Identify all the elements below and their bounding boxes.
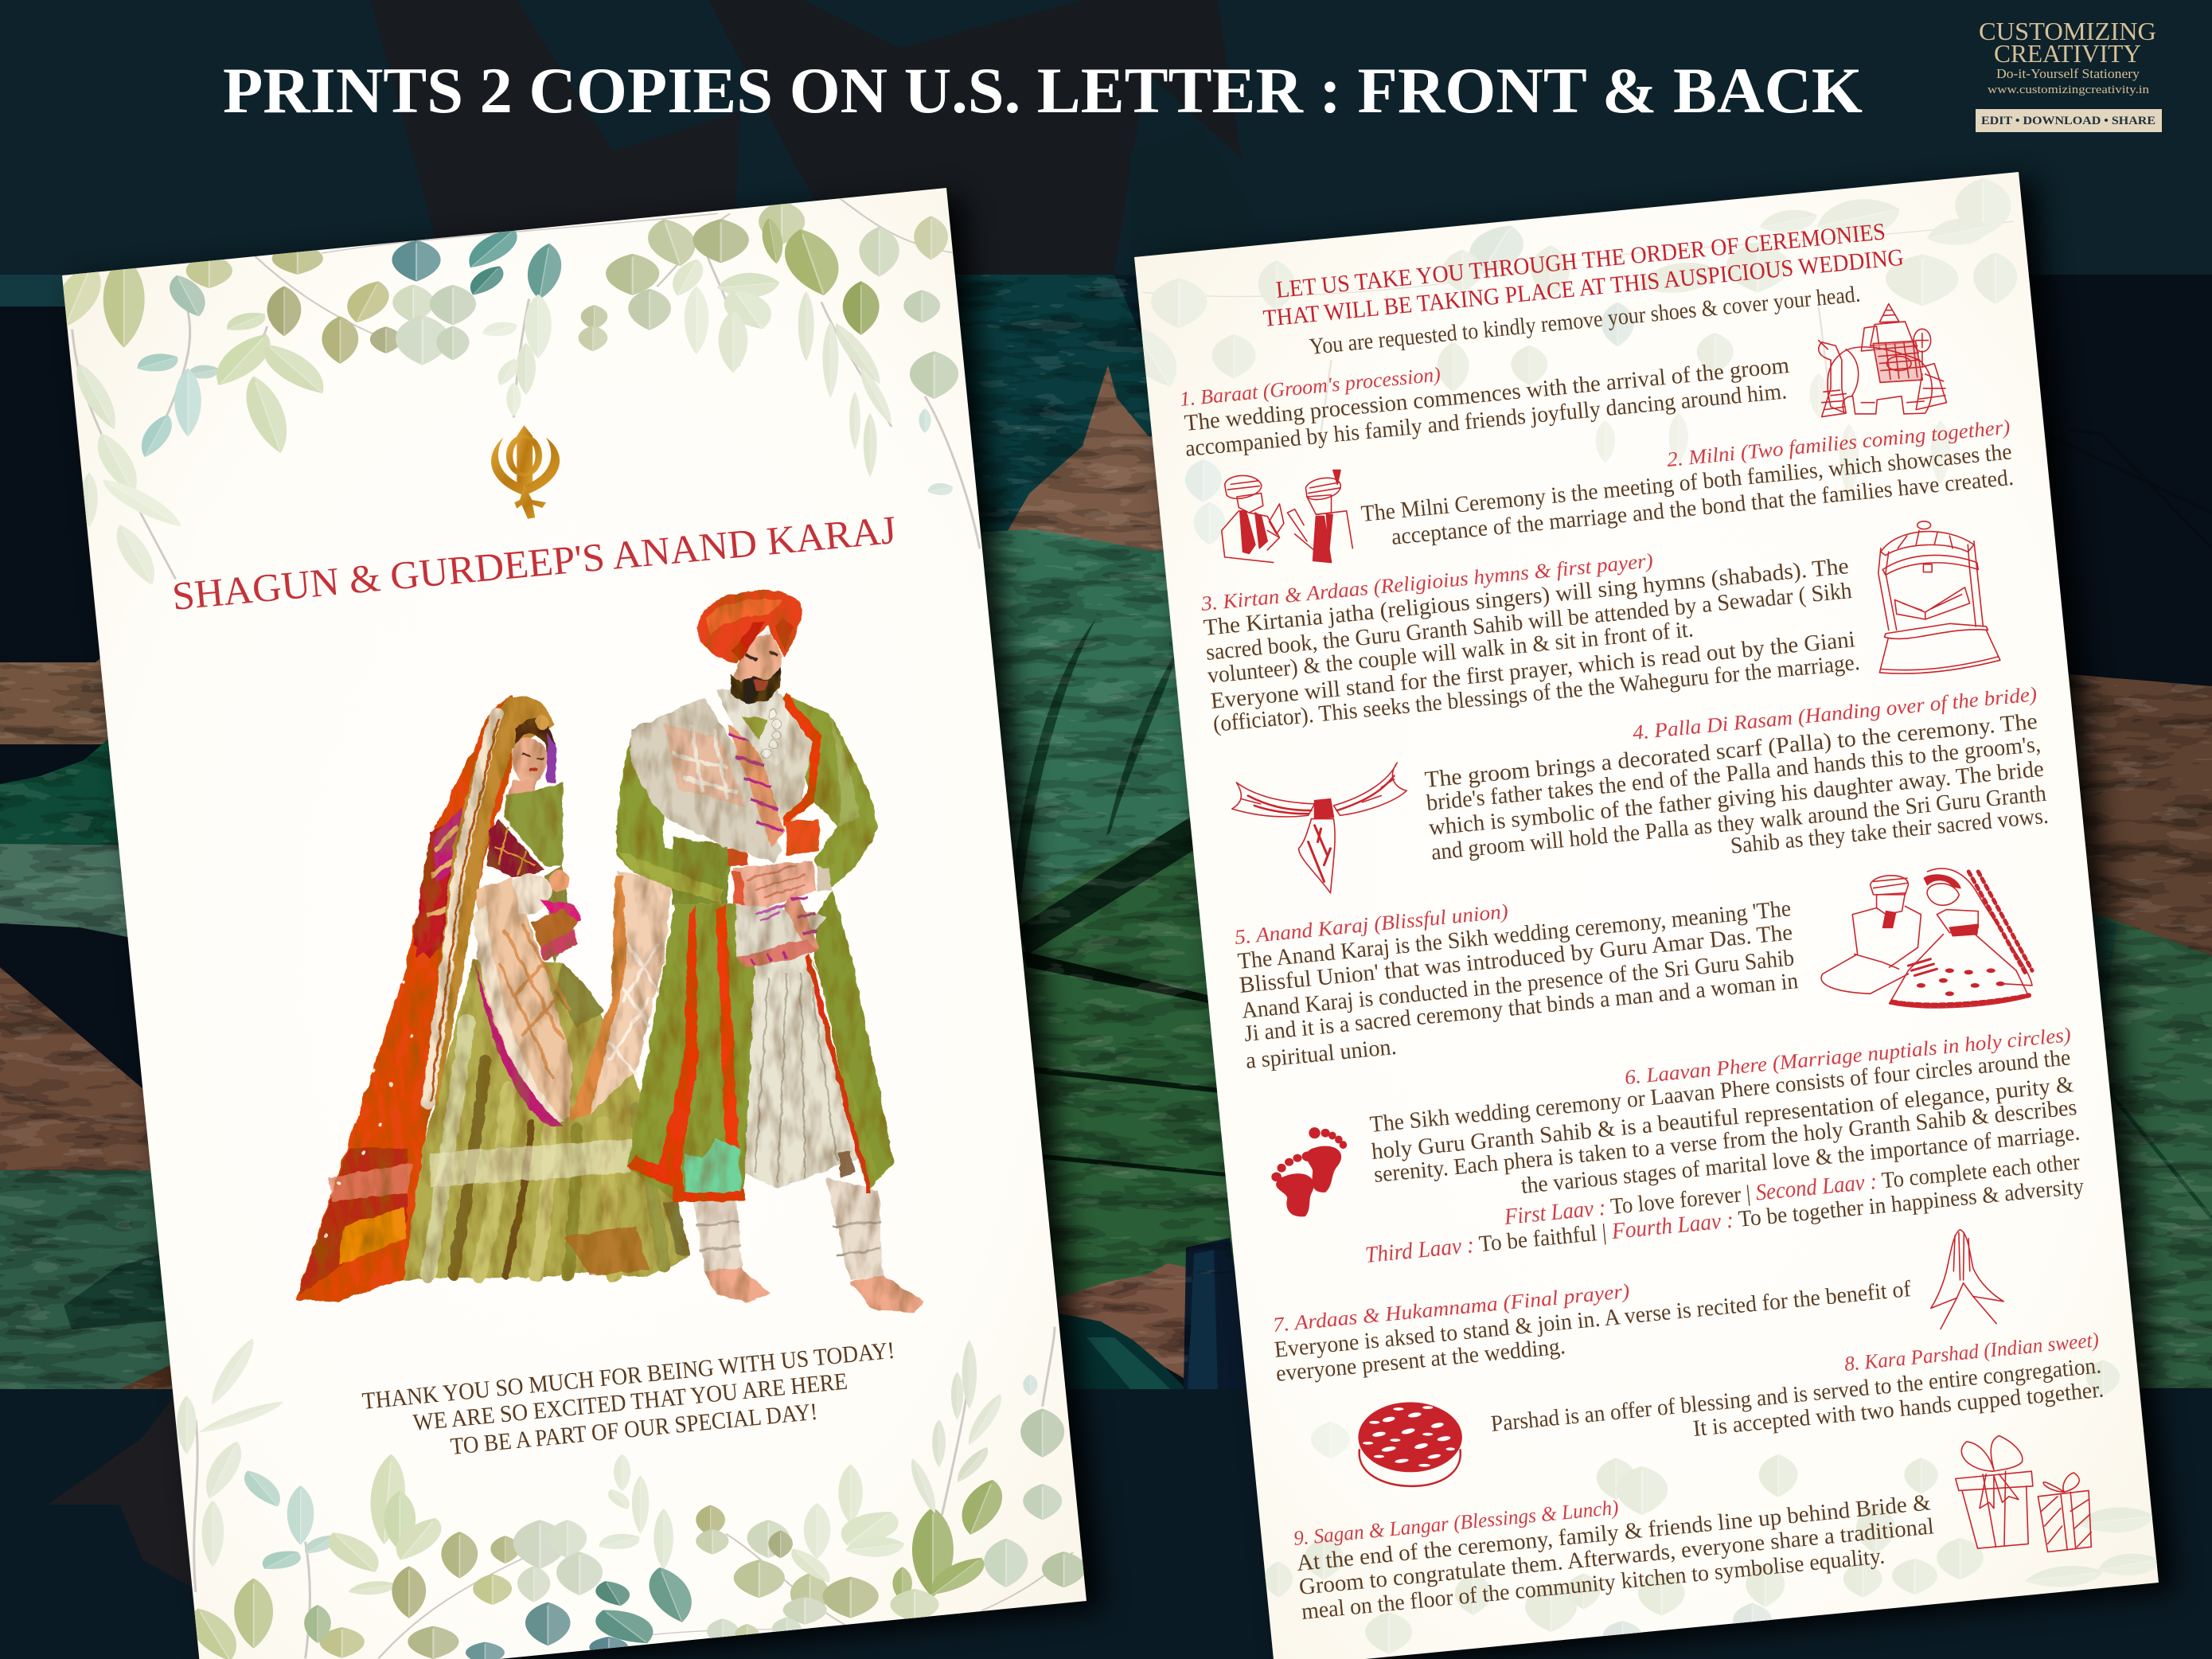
- section 5: Anand Karaj: 5. Anand Karaj (Blissful union): [1234, 900, 1509, 949]
- logo: Customizing Creativity: www.customizingcreativity.in: [1988, 84, 2150, 96]
- section 4: Palla Di Rasam: and groom will hold the Palla as they walk around the Sri Guru Granth: [1430, 781, 2048, 865]
- icon: elephant procession: [1819, 304, 1947, 417]
- section 1: Baraat: The wedding procession commences with the arrival of the groom: [1184, 353, 1791, 436]
- section 9: Sagan and Langar: At the end of the ceremony, family & friends line up behind Bride &: [1296, 1489, 1932, 1576]
- title: PRINTS 2 COPIES ON U.S. LETTER : FRONT & BACK: [223, 54, 1863, 127]
- logo: Customizing Creativity: EDIT • DOWNLOAD • SHARE: [1981, 115, 2155, 127]
- foliage: top garland of front card: [46, 198, 980, 587]
- section 6: Laavan Phere: 6. Laavan Phere (Marriage nuptials in holy circles): [1624, 1023, 2072, 1089]
- section 6: Laavan Phere: First Laav : To love forever | Second Laav : To complete each other: [1503, 1150, 2081, 1230]
- heading: order of ceremonies: LET US TAKE YOU THROUGH THE ORDER OF CEREMONIES: [1275, 218, 1886, 303]
- section 7: Ardaas and Hukamnama: Everyone is aksed to stand & join in. A verse is recited for the benefit of: [1274, 1276, 1912, 1363]
- section 9: Sagan and Langar: [1293, 1489, 1935, 1625]
- text: thank-you message: THANK YOU SO MUCH FOR BEING WITH US TODAY!: [361, 1337, 896, 1415]
- section 8: Kara Parshad: It is accepted with two hands cupped together.: [1692, 1376, 2105, 1442]
- section 8: Kara Parshad: Parshad is an offer of blessing and is served to the entire congregation.: [1490, 1353, 2102, 1437]
- section 2: Milni: The Milni Ceremony is the meeting of both families, which showcases the: [1360, 439, 2013, 527]
- section 5: Anand Karaj: [1234, 896, 1800, 1074]
- icon: two men greeting: [1222, 470, 1352, 563]
- section 5: Anand Karaj: The Anand Karaj is the Sikh wedding ceremony, meaning 'The: [1237, 896, 1792, 974]
- section 3: Kirtan and Ardaas: (officiator). This seeks the blessings of the the Waheguru for the marriage.: [1212, 650, 1861, 737]
- icon: gold khanda: [491, 425, 560, 519]
- section 7: Ardaas and Hukamnama: everyone present at the wedding.: [1275, 1333, 1566, 1387]
- section 3: Kirtan and Ardaas: The Kirtania jatha (religious singers) will sing hymns (shabads). The: [1203, 553, 1850, 641]
- icon: praying hands: [1931, 1230, 2003, 1329]
- section 4: Palla Di Rasam: [1424, 682, 2050, 865]
- section 2: Milni: [1360, 416, 2015, 550]
- section 6: Laavan Phere: The Sikh wedding ceremony or Laavan Phere consists of four circles around the: [1369, 1044, 2072, 1138]
- foliage: bottom garland of front card: [177, 1327, 1086, 1659]
- text: request note: You are requested to kindly remove your shoes & cover your head.: [1309, 282, 1861, 360]
- section 6: Laavan Phere: the various stages of marital love & the importance of marriage.: [1520, 1120, 2081, 1199]
- icon: knotted palla scarf: [1232, 763, 1406, 893]
- section 4: Palla Di Rasam: Sahib as they take their sacred vows.: [1730, 803, 2050, 859]
- heading: couple names: SHAGUN & GURDEEP'S ANAND KARAJ: [170, 507, 898, 619]
- section 3: Kirtan and Ardaas: Everyone will stand for the first prayer, which is read out by the Giani: [1210, 627, 1856, 714]
- section 3: Kirtan and Ardaas: sacred book, the Guru Granth Sahib will be attended by a Sewadar ( Sikh: [1205, 578, 1853, 666]
- logo: Customizing Creativity: [1976, 17, 2162, 132]
- section 5: Anand Karaj: Anand Karaj is conducted in the presence of the Sri Guru Sahib: [1241, 945, 1795, 1024]
- section 6: Laavan Phere: holy Guru Granth Sahib & is a beautiful representation of elegance, purity &: [1371, 1072, 2075, 1165]
- section 3: Kirtan and Ardaas: 3. Kirtan & Ardaas (Religioius hymns & first payer): [1200, 548, 1654, 615]
- heading: order of ceremonies: THAT WILL BE TAKING PLACE AT THIS AUSPICIOUS WEDDING: [1262, 244, 1905, 332]
- logo: Customizing Creativity: CREATIVITY: [1994, 39, 2141, 68]
- section 5: Anand Karaj: a spiritual union.: [1245, 1034, 1398, 1074]
- section 2: Milni: acceptance of the marriage and the bond that the families have created.: [1391, 465, 2015, 550]
- icon: red footprints: [1271, 1127, 1347, 1216]
- icon: Guru Granth Sahib palanquin: [1878, 521, 2000, 673]
- icon: seated couple: [1821, 869, 2032, 1008]
- section 4: Palla Di Rasam: 4. Palla Di Rasam (Handing over of the bride): [1632, 682, 2038, 744]
- section 6: Laavan Phere: serenity. Each phera is taken to a verse from the holy Granth Sahib & describes: [1373, 1095, 2078, 1188]
- section 9: Sagan and Langar: Groom to congratulate them. Afterwards, everyone share a traditional: [1298, 1513, 1935, 1600]
- logo: Customizing Creativity: Do-it-Yourself Stationery: [1996, 66, 2140, 81]
- section 5: Anand Karaj: Blissful Union' that was introduced by Guru Amar Das. The: [1239, 919, 1793, 998]
- section 1: Baraat: 1. Baraat (Groom's procession): [1179, 363, 1442, 411]
- section 6: Laavan Phere: [1364, 1023, 2085, 1268]
- section 4: Palla Di Rasam: The groom brings a decorated scarf (Palla) to the ceremony. The: [1424, 708, 2038, 793]
- section 4: Palla Di Rasam: bride's father takes the end of the Palla and hands this to the groom's,: [1426, 732, 2042, 816]
- section 7: Ardaas and Hukamnama: 7. Ardaas & Hukamnama (Final prayer): [1272, 1279, 1631, 1337]
- section 5: Anand Karaj: Ji and it is a sacred ceremony that binds a man and a woman in: [1243, 968, 1800, 1047]
- section 8: Kara Parshad: 8. Kara Parshad (Indian sweet): [1843, 1328, 2100, 1376]
- illustration: groom: [616, 590, 924, 1313]
- section 3: Kirtan and Ardaas: [1200, 548, 1861, 737]
- section 2: Milni: 2. Milni (Two families coming together): [1666, 416, 2011, 471]
- foliage: pale watermark leaves, top: [1112, 178, 2017, 545]
- text: thank-you message: TO BE A PART OF OUR SPECIAL DAY!: [450, 1399, 819, 1460]
- foliage: pale watermark leaves, bottom: [1264, 1360, 2167, 1653]
- icon: bowl of parshad: [1358, 1402, 1462, 1486]
- panel: front card: [46, 188, 1086, 1659]
- section 4: Palla Di Rasam: which is symbolic of the father giving his daughter away. The bride: [1428, 756, 2045, 841]
- section 6: Laavan Phere: Third Laav : To be faithful | Fourth Laav : To be together in happiness & adversity: [1364, 1173, 2085, 1268]
- illustration: bride: [296, 695, 691, 1302]
- text: thank-you message: [361, 1337, 896, 1460]
- text: thank-you message: WE ARE SO EXCITED THAT YOU ARE HERE: [412, 1368, 849, 1436]
- section 9: Sagan and Langar: meal on the floor of the community kitchen to symbolise equality.: [1301, 1544, 1886, 1625]
- section 9: Sagan and Langar: 9. Sagan & Langar (Blessings & Lunch): [1293, 1496, 1620, 1550]
- logo: Customizing Creativity: CUSTOMIZING: [1979, 17, 2156, 45]
- illustration: bride and groom: [296, 590, 924, 1313]
- icon: two gift boxes: [1956, 1436, 2091, 1552]
- section 3: Kirtan and Ardaas: volunteer) & the couple will walk in & sit in front of it.: [1207, 616, 1695, 689]
- section 1: Baraat: accompanied by his family and friends joyfully dancing around him.: [1184, 378, 1788, 462]
- panel: back card: [1112, 172, 2167, 1659]
